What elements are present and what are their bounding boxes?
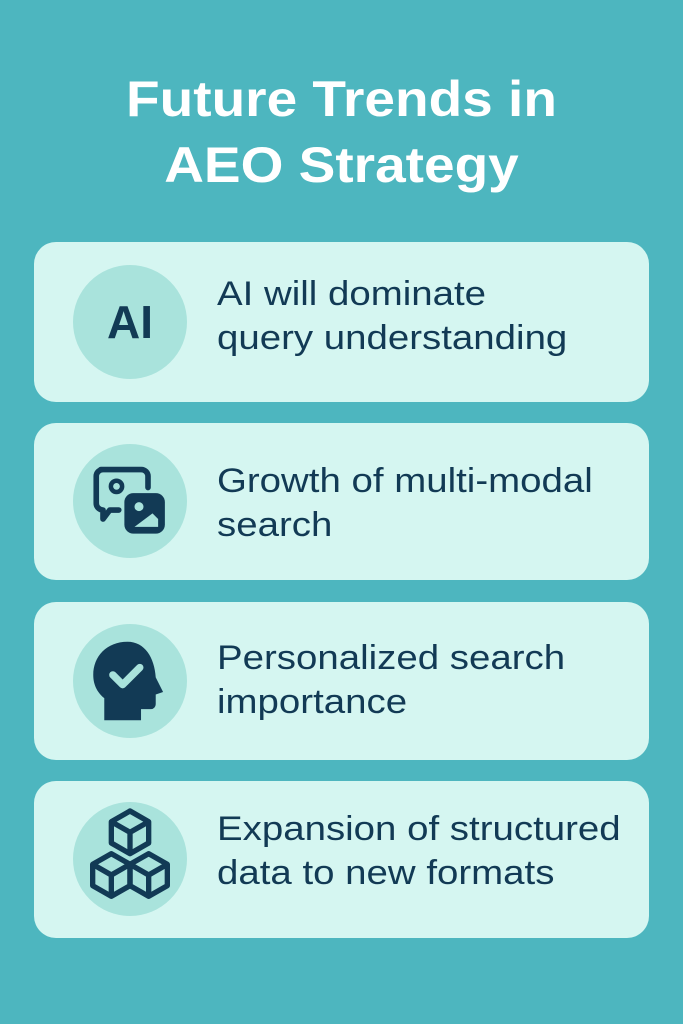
title (126, 71, 557, 193)
title: AEO Strategy (164, 137, 519, 193)
text: personalized (217, 639, 565, 721)
icon: head check (73, 624, 187, 738)
text: AI: query understanding (217, 319, 567, 357)
panel: personalized (34, 602, 649, 760)
text: multi-modal (217, 462, 593, 544)
icon: AI (73, 265, 187, 379)
icon: AI: AI (107, 296, 153, 348)
text: multi-modal: search (217, 506, 332, 544)
panel: AI (34, 242, 649, 402)
icon: cubes (73, 802, 187, 916)
title: Future Trends in (126, 71, 557, 127)
text: structured data: data to new formats (217, 854, 554, 892)
text: personalized: Personalized search (217, 639, 565, 677)
text: structured data: Expansion of structured (217, 810, 621, 848)
text: structured data (217, 810, 621, 892)
panel: multi-modal (34, 423, 649, 580)
icon: chat image (73, 444, 187, 558)
text: AI (217, 275, 567, 357)
text: personalized: importance (217, 683, 407, 721)
panel: structured data (34, 781, 649, 938)
text: multi-modal: Growth of multi-modal (217, 462, 593, 500)
text: AI: AI will dominate (217, 275, 486, 313)
